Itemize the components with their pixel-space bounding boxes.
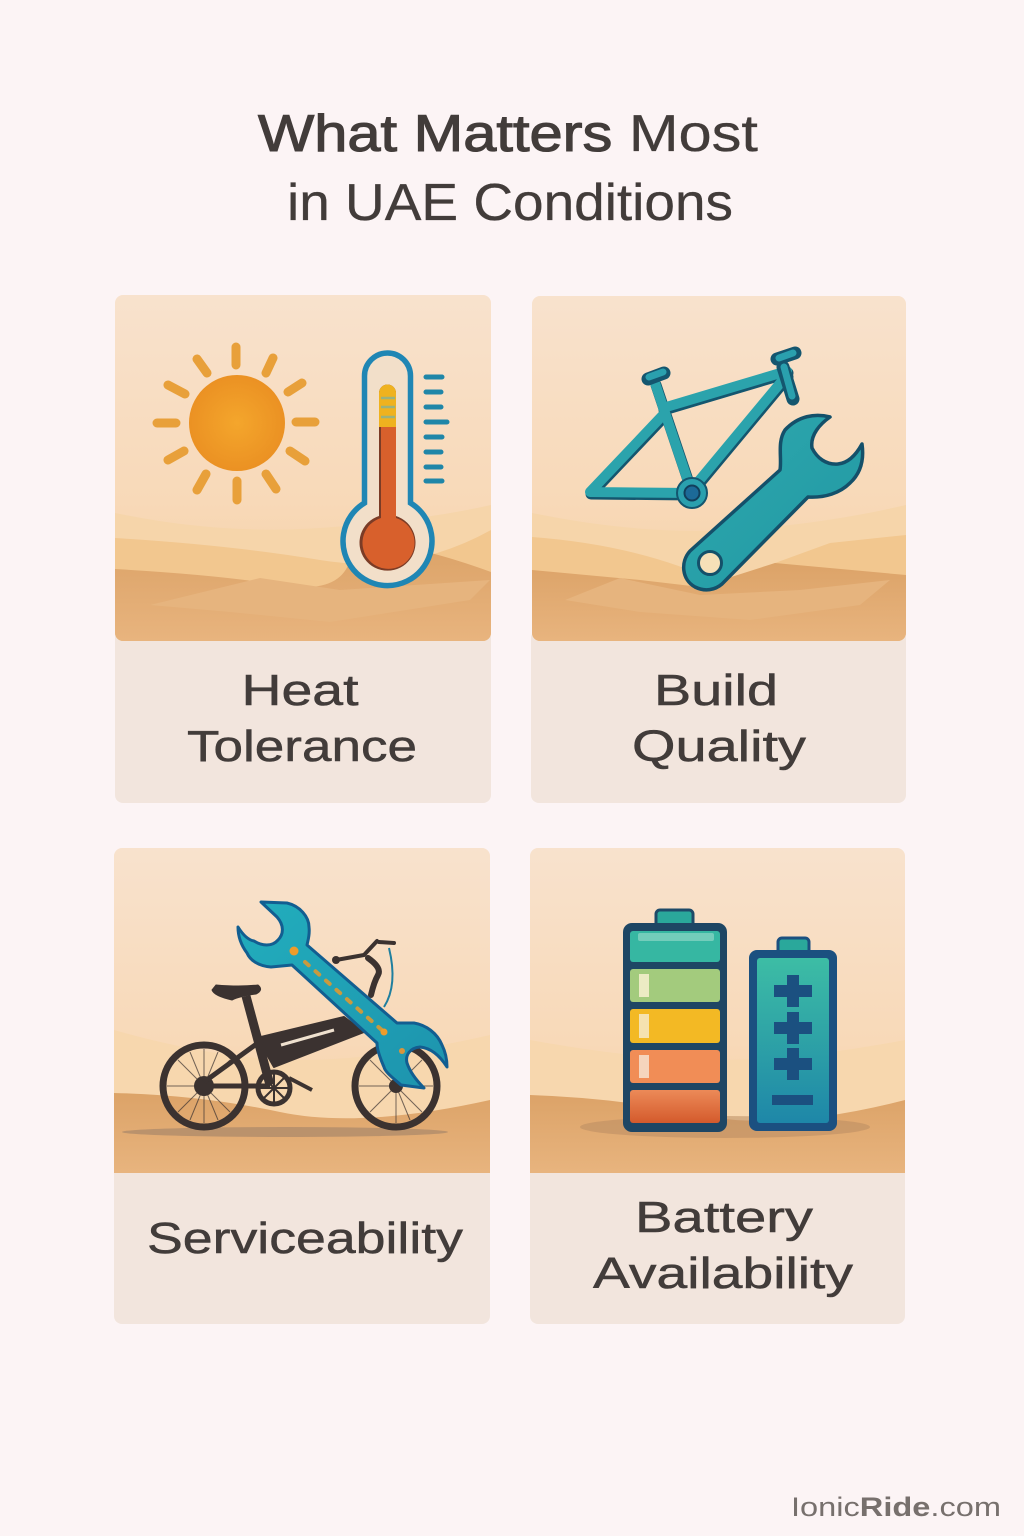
- icon: bike frame: [590, 353, 795, 508]
- panel: heat tolerance: [115, 295, 491, 803]
- icon: thermometer: [343, 353, 447, 586]
- panel: serviceability: [114, 848, 490, 1324]
- panel: build quality: [531, 296, 906, 803]
- desert scene: battery: [530, 848, 905, 1173]
- icon: large wrench: [238, 902, 447, 1088]
- label: build quality: Quality: [632, 722, 806, 771]
- label card: battery availability: [530, 1160, 905, 1324]
- icon: e-bike: [122, 941, 448, 1137]
- label: build quality: [632, 666, 806, 771]
- icon: wrench: [684, 415, 863, 590]
- watermark: Ionic Ride .com: [791, 1492, 1001, 1522]
- desert scene: heat: [115, 295, 491, 641]
- label: build quality: Build: [654, 666, 778, 715]
- label card: heat tolerance: [115, 630, 491, 803]
- desert scene: service: [114, 848, 490, 1173]
- title: in UAE Conditions: [287, 174, 733, 232]
- icon: sun: [157, 347, 315, 500]
- label: battery availability: Battery: [635, 1193, 813, 1242]
- label: heat tolerance: [187, 666, 417, 771]
- icon: segmented battery: [623, 910, 727, 1132]
- label card: serviceability: [114, 1160, 490, 1324]
- label: battery availability: Availability: [593, 1249, 853, 1298]
- label: battery availability: [593, 1193, 853, 1298]
- label: serviceability: Serviceability: [147, 1214, 463, 1263]
- label: heat tolerance: Heat: [242, 666, 358, 715]
- title: What Matters Most: [258, 105, 759, 163]
- panel: battery availability: [530, 848, 905, 1324]
- desert scene: build: [532, 296, 906, 641]
- title: [258, 105, 759, 232]
- icon: plus battery: [749, 938, 837, 1131]
- label card: build quality: [531, 630, 906, 803]
- label: heat tolerance: Tolerance: [187, 722, 417, 771]
